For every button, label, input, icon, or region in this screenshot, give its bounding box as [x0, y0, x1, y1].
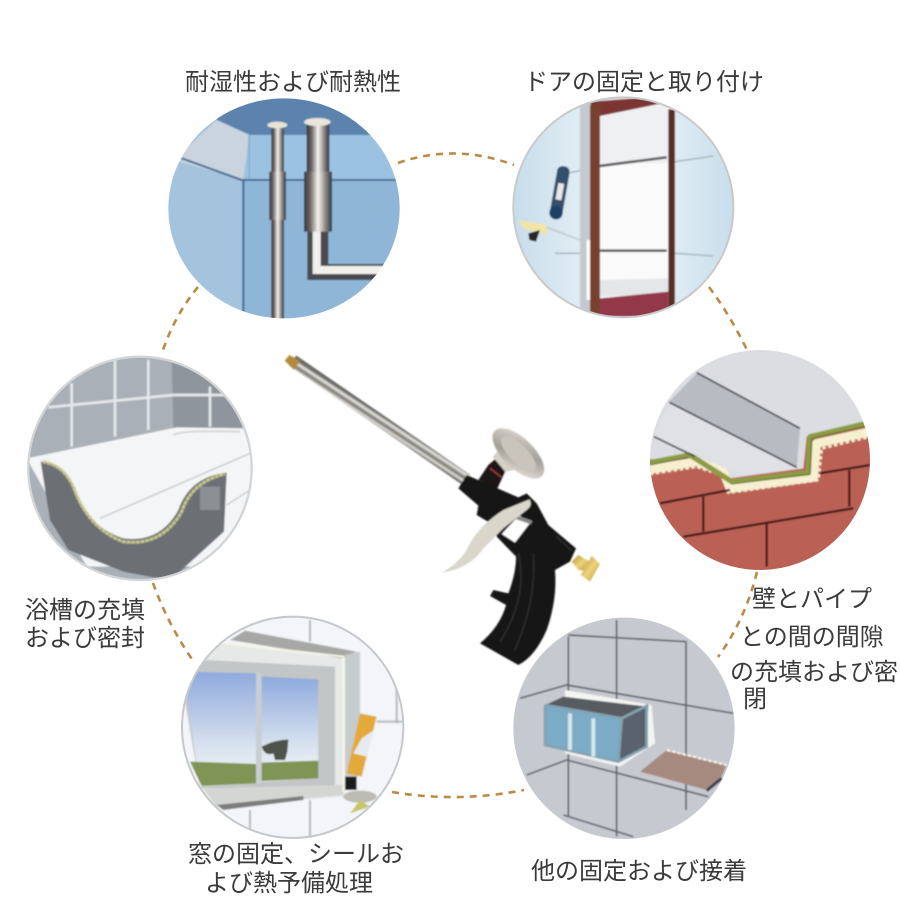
dashed connector ring: [153, 153, 757, 797]
heading: other fixing and bonding: 他の固定および接着: [531, 858, 747, 885]
pipe: left: [267, 122, 287, 325]
panel: bathtub filling and sealing: [27, 356, 253, 582]
brick mortar lines: [660, 465, 870, 567]
heading: wall and pipe gap line 4: 閉: [743, 686, 767, 713]
trigger: [442, 499, 531, 573]
heading: window fixing line 2: よび熱予備処理: [205, 870, 373, 897]
foam seal: [650, 423, 870, 493]
panel: moisture and heat resistance: [168, 98, 400, 318]
panel: wall and pipe gap: [650, 350, 870, 570]
heading: window fixing line 1: 窓の固定、シールお: [188, 841, 404, 868]
icon: foam tube and gun: [343, 713, 377, 813]
rod: [517, 517, 532, 523]
panel: door fixing and mounting: [510, 93, 740, 320]
heading: bathtub filling and sealing: 浴槽の充填: [25, 597, 145, 624]
tub cross-section: [41, 462, 227, 581]
heading: bathtub sealing second line: および密封: [25, 625, 145, 652]
illustration: foam gun: [285, 355, 600, 665]
heading: door fixing and mounting: ドアの固定と取り付け: [524, 69, 764, 96]
gun barrel: [285, 355, 467, 480]
trigger window: [502, 515, 529, 543]
heading: wall and pipe gap line 1: 壁とパイプ: [752, 586, 872, 613]
panel: other fixing and bonding: [513, 618, 735, 839]
pipe: right with elbow: [304, 118, 387, 280]
flange head: [478, 420, 552, 490]
heading: moisture and heat resistance: 耐湿性および耐熱性: [185, 69, 401, 96]
window glass with landscape: [183, 672, 318, 787]
gun body: [458, 475, 576, 665]
icon: foam can and gun: [518, 165, 571, 242]
heading: wall and pipe gap line 3: の充填および密: [730, 659, 898, 686]
fixture tile: [640, 750, 727, 791]
panel: window fixing and sealing: [177, 613, 410, 843]
brass nut: [572, 555, 600, 582]
heading: wall and pipe gap line 2: との間の間隙: [740, 624, 884, 651]
fixture box: [545, 690, 655, 767]
